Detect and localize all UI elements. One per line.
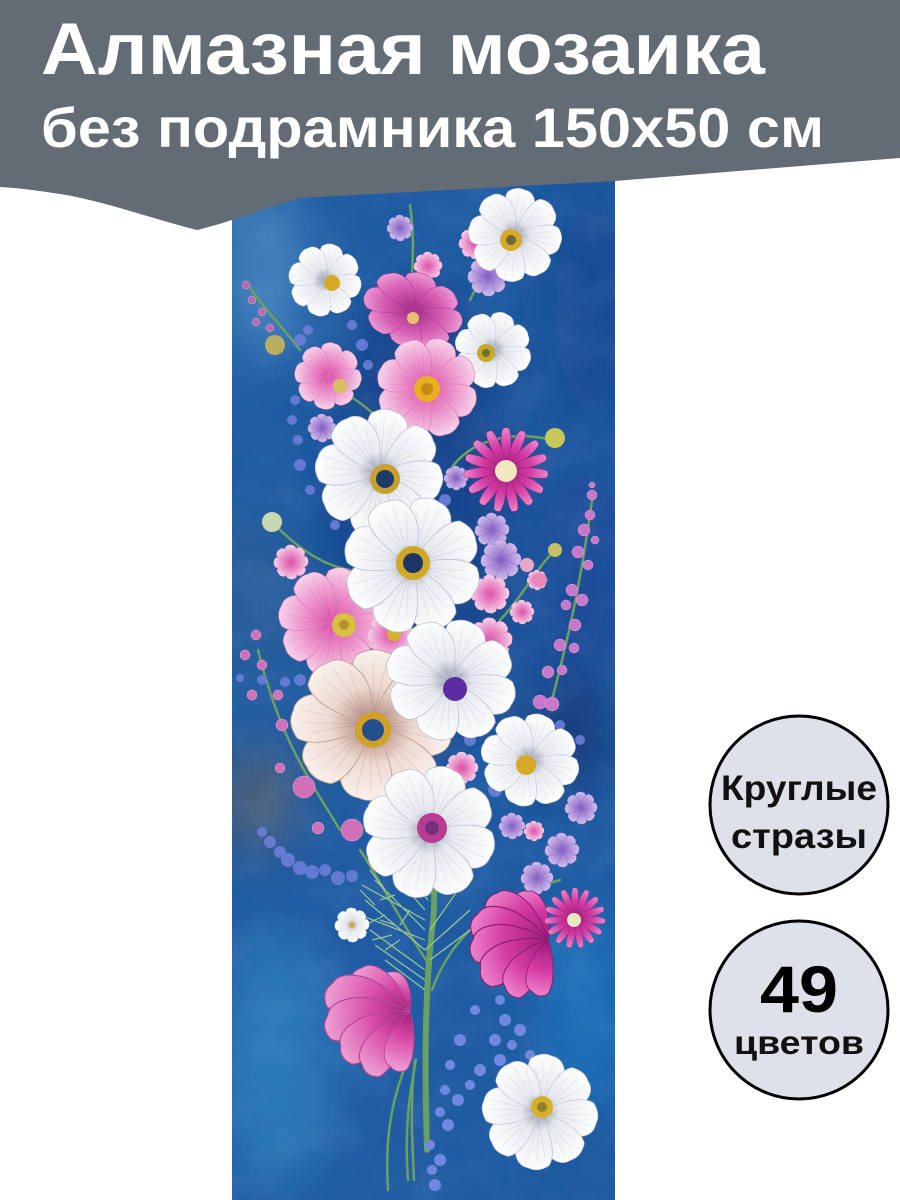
flower: cream large <box>290 649 452 801</box>
flower: white top left <box>288 244 362 316</box>
title line 2: без подрамника 150х50 см <box>41 96 824 159</box>
title line 1: Алмазная мозаика <box>41 9 767 90</box>
grey title banner <box>0 0 900 230</box>
flower: pink mid-left <box>278 567 374 672</box>
painted blue background <box>232 181 615 1200</box>
small lilac and pink flowers <box>274 215 597 894</box>
flower: white large 1 <box>314 408 444 530</box>
flower: white top right <box>468 188 562 282</box>
flower: magenta daisy right <box>463 428 549 513</box>
flower: pink left <box>294 342 362 410</box>
badge: 49 colours: цветов <box>734 1024 864 1061</box>
flower: white purple centre <box>386 620 516 740</box>
sprig: left pink upper <box>242 281 274 332</box>
lavender sprigs <box>236 281 599 1191</box>
buds <box>262 335 565 587</box>
flower: white pink right <box>480 714 580 806</box>
sprig: bottom lavender <box>425 995 535 1191</box>
badge: 49 colours: 49 <box>760 952 838 1026</box>
flower: white bottom <box>482 1054 598 1170</box>
flower: pink small right <box>544 888 606 948</box>
flower: white large 2 <box>344 498 480 632</box>
flower: pink lower left, fan of petals <box>324 964 414 1078</box>
flower: white lower centre <box>363 766 495 898</box>
flower: magenta lower right, fan of petals <box>469 890 554 998</box>
flower: pink centre <box>377 338 477 436</box>
sprig: right pink <box>533 482 599 711</box>
flower: magenta top <box>363 272 463 346</box>
sprig: left pink lower <box>240 630 363 841</box>
badge: round rhinestones <box>710 716 888 894</box>
flower: small white bottom centre-left <box>335 908 369 942</box>
painting: floral diamond mosaic <box>232 181 615 1200</box>
sprig: periwinkle lavender <box>236 320 585 885</box>
title <box>41 9 824 159</box>
badge: round rhinestones: стразы <box>731 817 867 856</box>
paint texture <box>232 170 615 1200</box>
badge: 49 colours <box>710 921 888 1099</box>
flower: small pink centre <box>368 618 412 654</box>
flower: white upper right <box>455 312 531 388</box>
feathery green foliage <box>360 860 470 990</box>
badge: round rhinestones: Круглые <box>721 769 877 808</box>
stems <box>248 205 592 1190</box>
